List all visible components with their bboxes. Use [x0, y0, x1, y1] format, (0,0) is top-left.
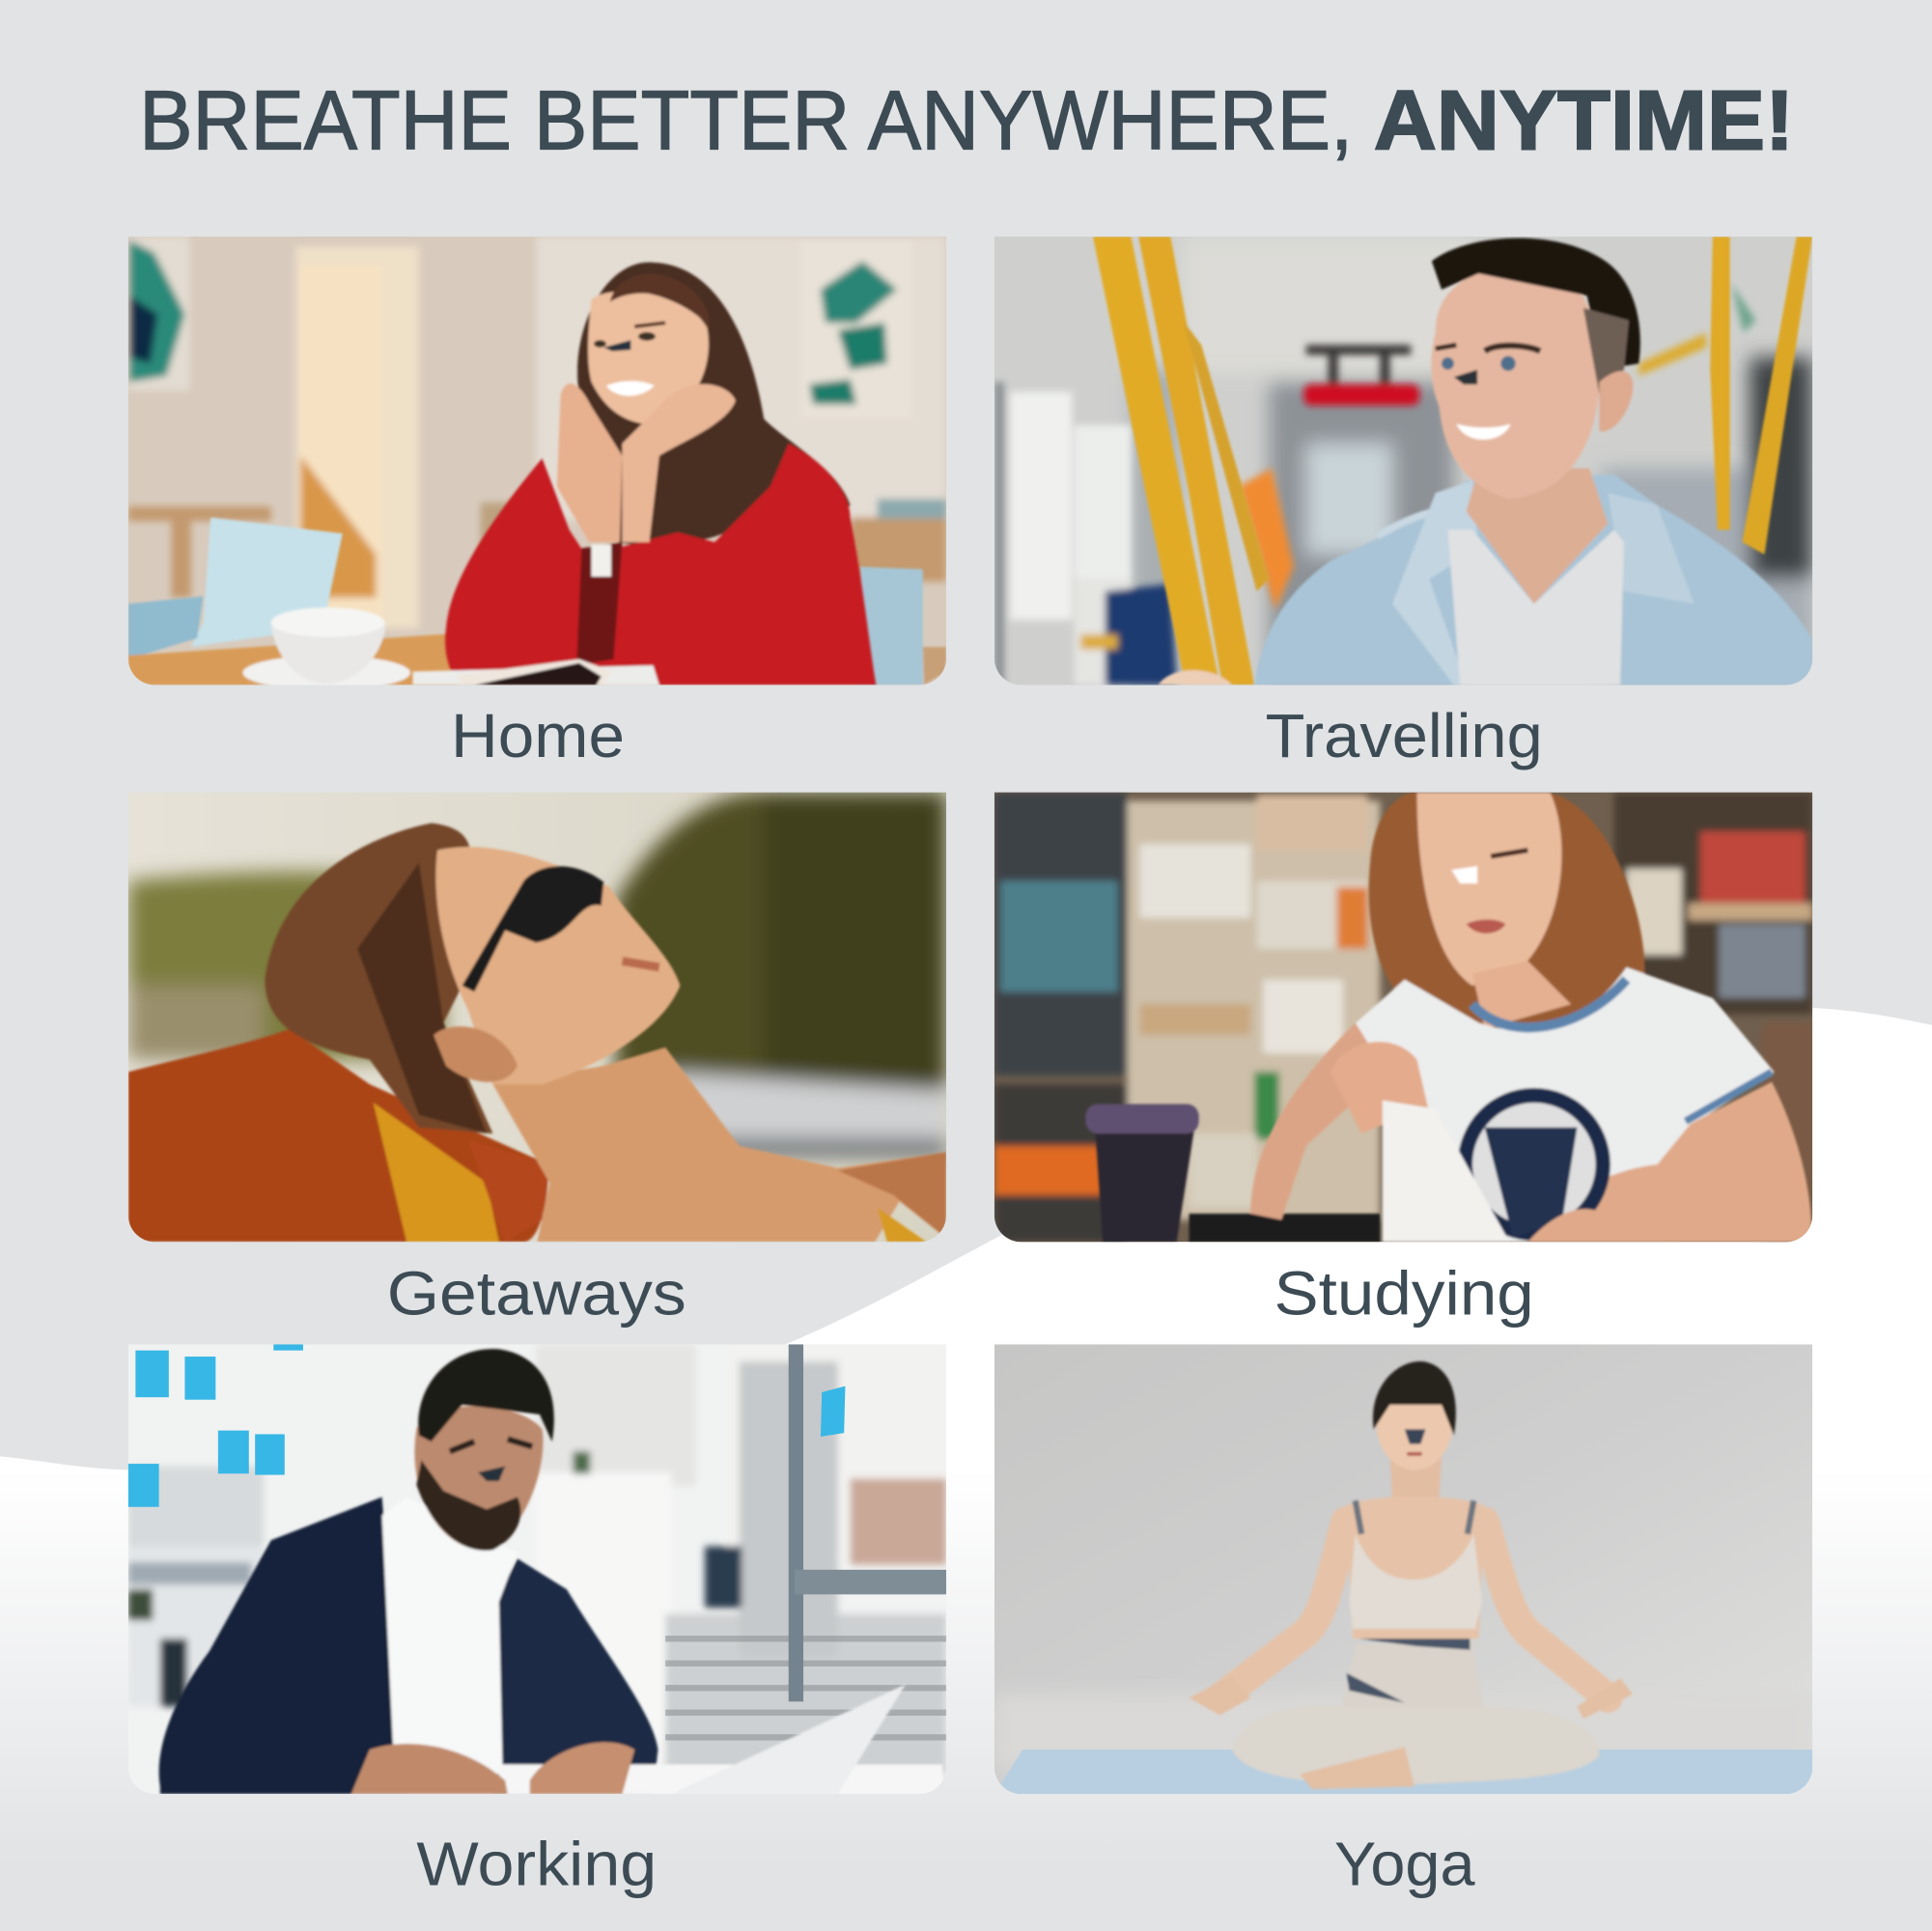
photo: woman relaxing in sunglasses	[128, 793, 946, 1242]
woman	[492, 1048, 946, 1242]
panel: home	[128, 237, 946, 770]
panel: working	[128, 1344, 946, 1899]
title: BREATHE BETTER ANYWHERE,	[139, 73, 1353, 167]
woman reading	[1369, 793, 1645, 1029]
yoga mat	[994, 1749, 1812, 1794]
label: Yoga: Yoga	[1334, 1830, 1475, 1899]
background wave	[0, 1007, 1932, 1931]
panel: yoga	[994, 1344, 1812, 1899]
panel: studying	[994, 793, 1812, 1329]
label: Travelling: Travelling	[1266, 701, 1543, 770]
photo: man on bus	[994, 237, 1812, 686]
sticky notes	[128, 1344, 845, 1507]
label: Home: Home	[451, 701, 625, 770]
photo: woman meditating	[994, 1344, 1812, 1794]
photo: woman in library	[994, 793, 1812, 1245]
title: ANYTIME!	[1374, 73, 1794, 167]
label: Working: Working	[416, 1830, 657, 1899]
panel: getaways	[128, 793, 946, 1329]
label: Getaways: Getaways	[387, 1259, 686, 1329]
panel: travelling	[994, 237, 1812, 770]
man with denim jacket	[1254, 238, 1812, 686]
photo: woman at home	[128, 237, 946, 690]
label: Studying: Studying	[1274, 1259, 1534, 1329]
photo: man at desk	[128, 1344, 946, 1794]
woman in red poncho	[413, 263, 876, 686]
